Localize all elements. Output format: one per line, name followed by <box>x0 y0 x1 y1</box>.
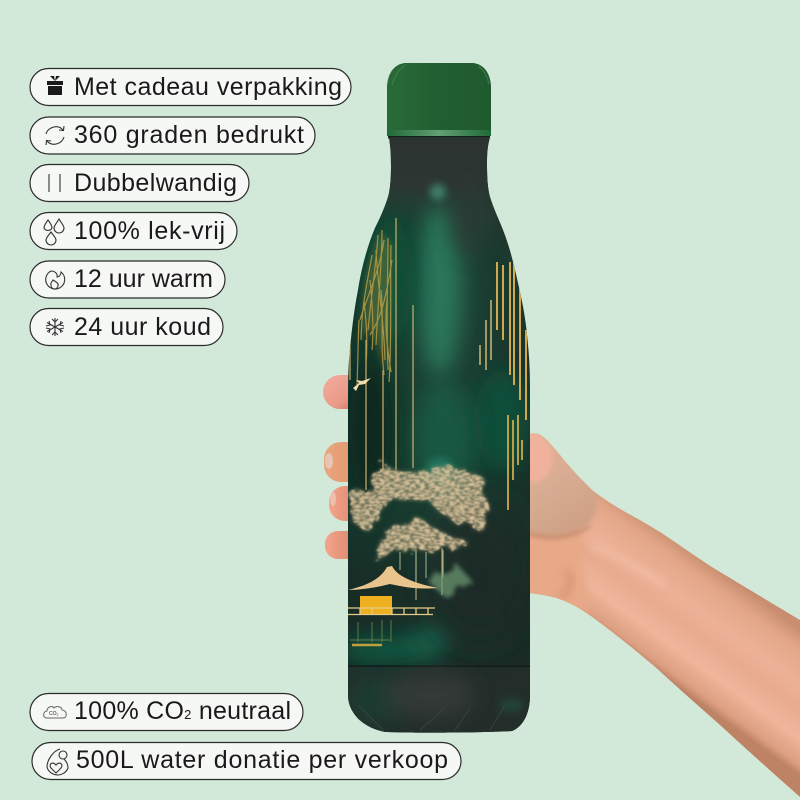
pill: 500L water donatie per verkoop: 500L water donatie per verkoop <box>76 746 448 774</box>
feature pills <box>30 68 461 780</box>
icon: droplets <box>44 219 64 245</box>
wrist shadow <box>560 570 570 598</box>
finger four <box>325 531 365 559</box>
icon: CO2 cloud: CO₂ <box>49 711 58 717</box>
pill: 24 uur koud <box>30 308 223 346</box>
pill: 100% CO2 neutraal: 100% CO2 neutraal <box>74 697 291 725</box>
pill: 500L water donatie per verkoop <box>32 742 461 780</box>
watercolour washes <box>340 170 530 726</box>
icon: water drop with heart <box>47 749 68 775</box>
icon: rotate arrows <box>46 126 64 145</box>
icon: snowflake <box>46 318 64 336</box>
pill: met cadeau verpakking <box>30 68 351 106</box>
bottle body <box>348 137 530 733</box>
pill: 100% lek-vrij <box>30 212 237 250</box>
pale green tree <box>432 567 472 597</box>
pill: 100% lek-vrij: 100% lek-vrij <box>74 217 225 245</box>
icon: CO2 cloud <box>44 707 66 718</box>
cap <box>387 63 491 138</box>
pill: dubbelwandig <box>30 164 249 202</box>
palm <box>530 535 588 613</box>
icon: double wall <box>49 174 60 192</box>
tree canopy <box>350 464 488 560</box>
thumb <box>530 434 598 536</box>
pill: 360 graden bedrukt <box>30 117 315 154</box>
pill: 100% CO2 neutraal <box>30 694 303 730</box>
arm and palm <box>510 425 800 800</box>
icon: flame <box>46 271 65 289</box>
pagoda wall <box>360 596 392 614</box>
gold reeds right <box>480 262 526 510</box>
thumb tip <box>530 436 553 482</box>
pill: met cadeau verpakking: Met cadeau verpakking <box>74 73 342 101</box>
base seam and base <box>348 666 530 733</box>
thumb crease shadow <box>527 526 590 537</box>
pill: 12 uur warm <box>30 261 225 298</box>
gold reeds left <box>357 230 392 385</box>
reflection <box>350 620 391 645</box>
finger one <box>323 375 363 409</box>
bottle <box>30 63 540 780</box>
pill: 360 graden bedrukt: 360 graden bedrukt <box>74 121 304 149</box>
pagoda roof <box>348 566 438 590</box>
bird <box>353 378 371 391</box>
pill: dubbelwandig: Dubbelwandig <box>74 169 237 197</box>
icon: gift <box>47 76 63 95</box>
railing <box>348 608 435 614</box>
hand and arm <box>323 375 800 800</box>
wrist tendon highlight <box>590 545 665 585</box>
pill: 24 uur koud: 24 uur koud <box>74 313 211 341</box>
finger two <box>324 442 364 482</box>
pill: 12 uur warm: 12 uur warm <box>74 265 213 293</box>
finger three <box>329 486 369 521</box>
gold vertical lines <box>350 218 443 600</box>
